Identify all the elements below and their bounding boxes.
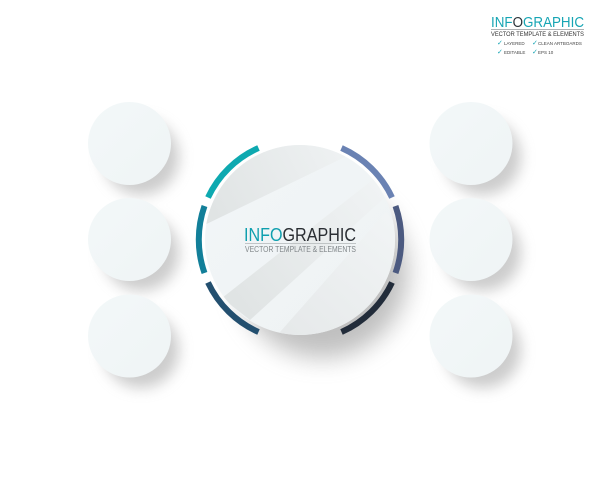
center title: VECTOR TEMPLATE & ELEMENTS: [245, 245, 356, 254]
left column circles: [88, 102, 171, 378]
main circle with light beams: [205, 145, 395, 335]
top-right logo: EPS 10: [538, 50, 554, 55]
top-right logo: LAYERED: [504, 41, 525, 46]
segmented ring: [199, 148, 401, 332]
top-right logo: ✓: [532, 40, 538, 47]
right column circles: [430, 102, 512, 378]
shadows of small circles, right column: [445, 119, 521, 388]
shadows of small circles, left column: [103, 119, 179, 388]
top-right logo: CLEAN ARTBOARDS: [538, 41, 582, 46]
top-right logo: INFOGRAPHIC: [491, 14, 584, 31]
top-right logo: [491, 14, 584, 56]
center title: INFOGRAPHIC: [244, 224, 356, 245]
main circle shadow: [236, 186, 408, 358]
top-right logo: EDITABLE: [504, 50, 525, 55]
top-right logo: VECTOR TEMPLATE & ELEMENTS: [491, 32, 584, 38]
infographic canvas: [88, 17, 584, 394]
center title: [244, 224, 356, 254]
top-right logo: ✓: [497, 49, 503, 56]
top-right logo: ✓: [497, 40, 503, 47]
top-right logo: ✓: [532, 49, 538, 56]
